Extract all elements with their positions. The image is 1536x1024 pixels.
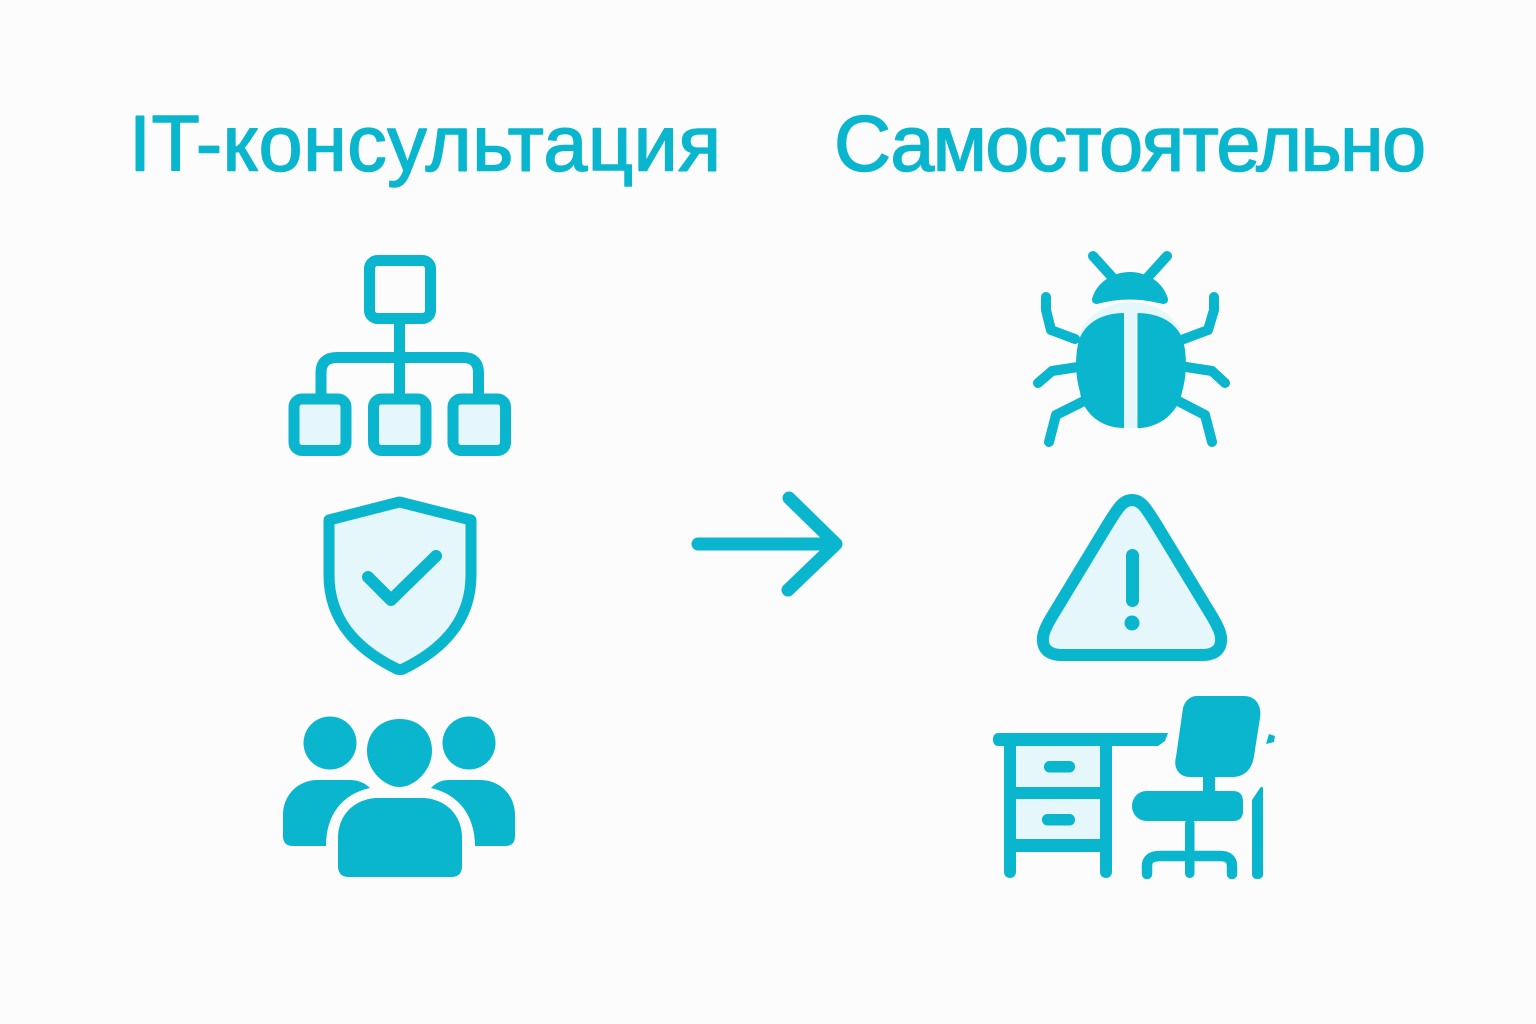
icon: bug [1038, 256, 1225, 442]
arrow [698, 498, 836, 590]
icon: group of people [283, 716, 515, 877]
heading: IT-консультация: IT-консультация [129, 98, 721, 188]
icon: shield with check [329, 502, 471, 670]
heading: Самостоятельно: Самостоятельно [834, 98, 1426, 188]
icon: warning triangle [1043, 500, 1221, 655]
icon: desk and chair [993, 696, 1275, 879]
icon: hierarchy [294, 260, 506, 450]
